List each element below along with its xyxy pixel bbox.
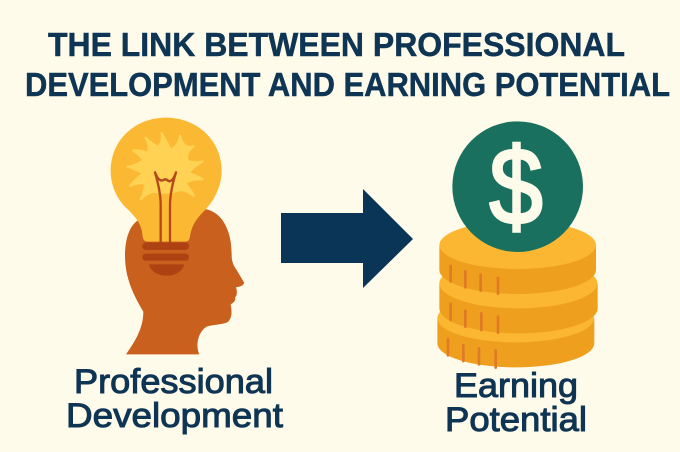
label: earning potential: Earning xyxy=(454,367,578,405)
filament xyxy=(155,172,176,242)
label: earning potential: Potential xyxy=(445,401,587,439)
icon: head with light bulb xyxy=(111,118,244,354)
top coin xyxy=(439,221,596,294)
label: earning potential xyxy=(445,367,587,439)
head silhouette xyxy=(125,209,244,354)
light bulb glass xyxy=(111,118,222,242)
label: professional development xyxy=(66,363,284,435)
label: professional development: Development xyxy=(66,397,284,435)
icon: coin stack with dollar xyxy=(437,121,598,368)
bulb base xyxy=(142,242,189,250)
arrow xyxy=(281,189,413,288)
middle coin xyxy=(439,258,598,333)
bottom coin xyxy=(437,294,594,368)
green dollar medallion xyxy=(452,121,583,252)
label: professional development: Professional xyxy=(74,363,273,401)
dollar sign: $ xyxy=(489,125,543,247)
sunburst glow xyxy=(128,133,202,199)
title xyxy=(25,26,670,103)
title: THE LINK BETWEEN PROFESSIONAL xyxy=(48,26,625,63)
